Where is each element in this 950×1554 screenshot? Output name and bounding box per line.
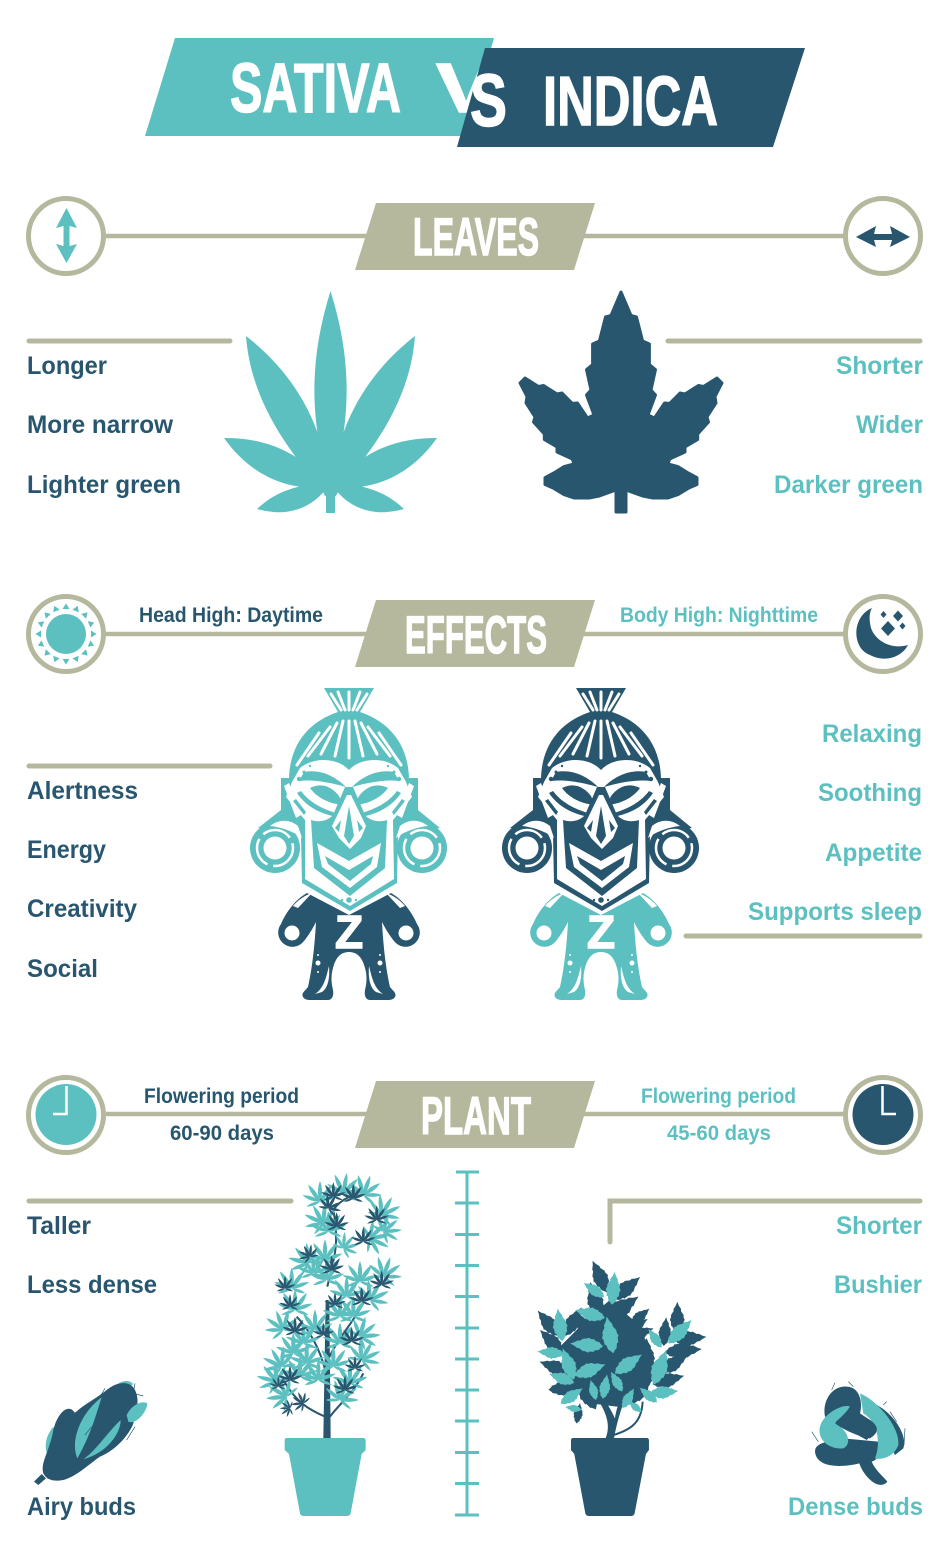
section heading: leaves bbox=[355, 203, 595, 270]
indica plant bbox=[532, 1257, 707, 1516]
indica flowering period: Flowering period bbox=[641, 1085, 796, 1108]
dark pot bbox=[571, 1438, 649, 1516]
section heading: effects: EFFECTS bbox=[405, 606, 547, 665]
icon: sun bbox=[28, 596, 104, 672]
dense buds label: Dense buds bbox=[788, 1493, 923, 1521]
indica effects list bbox=[748, 720, 922, 926]
indica title: INDICA bbox=[543, 62, 718, 140]
sativa effects list: Energy bbox=[27, 836, 106, 864]
sativa plant traits: Less dense bbox=[27, 1271, 157, 1299]
letter S: S bbox=[470, 59, 507, 142]
letter V: V bbox=[436, 49, 496, 127]
teal pot bbox=[285, 1438, 366, 1516]
indica flowering period: 45-60 days bbox=[667, 1122, 771, 1145]
title banner bbox=[145, 38, 805, 147]
icon: horizontal arrows bbox=[846, 198, 920, 274]
sativa effects list: Alertness bbox=[27, 777, 138, 805]
sativa flowering period: 60-90 days bbox=[170, 1122, 274, 1145]
sativa figure: Z bbox=[335, 906, 363, 958]
icon: airy bud bbox=[34, 1381, 147, 1485]
section heading: plant: PLANT bbox=[421, 1087, 531, 1146]
sativa leaf traits: Longer bbox=[27, 352, 107, 380]
nighttime label: Body High: Nighttime bbox=[620, 604, 818, 627]
indica effects list: Appetite bbox=[825, 839, 922, 867]
sativa leaf traits bbox=[27, 352, 181, 499]
airy buds label: Airy buds bbox=[27, 1493, 136, 1521]
indica effects list: Soothing bbox=[818, 779, 922, 807]
indica flowering period bbox=[641, 1085, 796, 1145]
sativa plant bbox=[249, 1169, 408, 1516]
indica effects list: Supports sleep bbox=[748, 898, 922, 926]
sativa title: SATIVA bbox=[230, 49, 401, 127]
indica leaf traits bbox=[774, 352, 923, 499]
tall plant stems bbox=[323, 1300, 331, 1438]
sativa flowering period bbox=[144, 1085, 299, 1145]
sativa flowering period: Flowering period bbox=[144, 1085, 299, 1108]
sativa leaf traits: More narrow bbox=[27, 411, 174, 439]
sativa effects list: Creativity bbox=[27, 895, 137, 923]
indica leaf bbox=[520, 292, 722, 512]
indica figure bbox=[502, 688, 699, 1000]
icon: moon and stars bbox=[846, 596, 920, 672]
icon: vertical arrows bbox=[28, 198, 104, 274]
section heading: effects bbox=[355, 600, 595, 667]
section heading: leaves: LEAVES bbox=[413, 208, 539, 267]
indica plate bbox=[457, 48, 805, 147]
indica leaf traits: Wider bbox=[856, 411, 923, 439]
height ruler bbox=[455, 1172, 479, 1515]
sativa plant traits: Taller bbox=[27, 1212, 91, 1240]
indica leaf traits: Darker green bbox=[774, 471, 923, 499]
sativa effects list: Social bbox=[27, 955, 98, 983]
sativa effects list bbox=[27, 777, 138, 983]
indica figure: Z bbox=[587, 906, 615, 958]
sativa figure bbox=[250, 688, 447, 1000]
sativa leaf bbox=[224, 291, 437, 513]
sativa plate bbox=[145, 38, 494, 136]
icon: dense bud bbox=[812, 1382, 905, 1485]
indica plant traits: Shorter bbox=[836, 1212, 922, 1240]
daytime label: Head High: Daytime bbox=[139, 604, 323, 627]
indica plant traits: Bushier bbox=[834, 1271, 922, 1299]
sativa leaf traits: Lighter green bbox=[27, 471, 181, 499]
indica effects list: Relaxing bbox=[822, 720, 922, 748]
sativa plant traits bbox=[27, 1212, 157, 1299]
bushy plant stems bbox=[598, 1393, 627, 1438]
indica plant traits bbox=[834, 1212, 922, 1299]
icon: clock indica bbox=[846, 1078, 920, 1152]
section heading: plant bbox=[355, 1081, 595, 1148]
icon: clock sativa bbox=[28, 1078, 104, 1152]
indica leaf traits: Shorter bbox=[836, 352, 923, 380]
